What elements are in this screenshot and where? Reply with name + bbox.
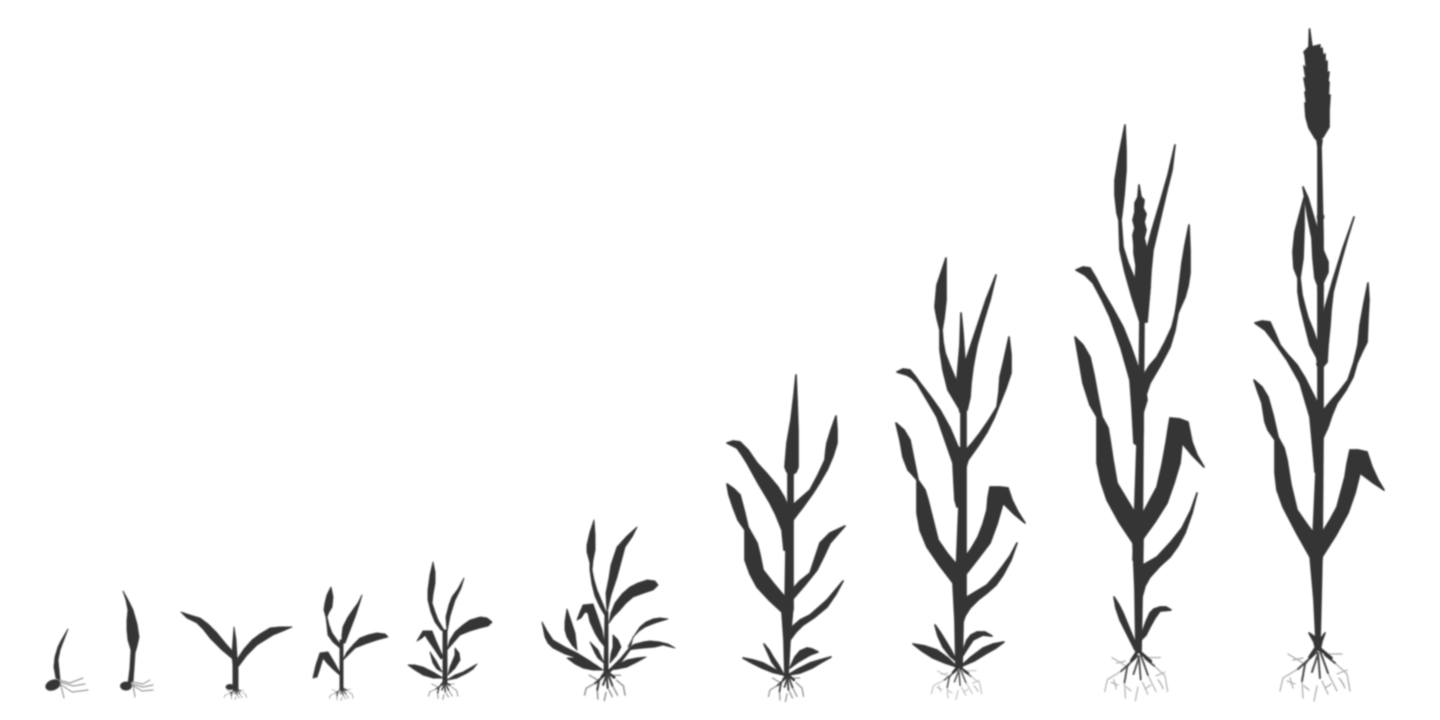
low right leaf [608,657,646,670]
left upright leaf [565,609,577,650]
folded leaf [963,487,1025,578]
roots [224,689,247,700]
plant stage 6: bushy tillers [542,520,675,701]
inner right leaf [448,648,460,675]
roots [585,672,625,701]
plant stage 3: two leaves [181,612,292,700]
low left leaf [913,644,957,667]
shoot [54,629,68,680]
small left leaf [764,644,784,675]
second right leaf [962,543,1017,625]
left leaf [897,369,966,507]
folded leaf [417,631,443,659]
folded leaf [313,652,342,678]
lower stem [782,606,793,676]
inner left leaf [430,652,442,672]
lower stem [1310,555,1322,640]
lower left leaf [1254,380,1322,558]
right leaf [447,617,492,650]
stem [785,470,793,610]
inner right leaf [610,635,621,663]
roots [931,667,982,700]
right upper branch leaf [628,618,668,647]
roots [428,682,458,699]
top right leaf [342,595,362,643]
upper stem [1312,285,1323,560]
right leaf [343,633,388,660]
stem [443,630,447,682]
lower stem [953,580,963,668]
right long leaf [961,275,996,412]
stem node [1318,214,1324,220]
leaf [123,591,139,684]
right fat leaf [609,580,658,623]
low left leaf [567,658,603,670]
top left leaf [1293,198,1322,365]
folded leaf [1142,418,1204,540]
right leaf [238,627,292,667]
lower left leaf [1075,337,1142,552]
right low branch leaf [628,641,675,650]
roots [1105,652,1168,701]
stem [1133,318,1144,560]
low right leaf [788,657,831,675]
sheath [1135,250,1150,322]
seed [120,682,132,690]
small left leaf [1114,597,1137,650]
plant stage 10: mature wheat with ear [1254,29,1384,701]
stem [232,627,238,690]
right low leaf [790,581,843,640]
plant stage 1: germinating seed [44,629,88,698]
top left leaf [935,258,963,412]
plant stage 2: first shoot [120,591,153,697]
small right leaf [962,632,992,657]
right middle leaf [792,526,845,600]
left leaf [1076,267,1147,445]
left leaf [542,622,602,670]
inner left leaf [590,642,604,663]
lower left leaf [896,423,964,590]
right long leaf [1317,217,1354,368]
upper sheath leaf [1303,187,1328,286]
low right leaf [447,664,477,680]
top left leaf [1115,125,1147,322]
right leaf [965,337,1011,470]
right leaf [1143,225,1190,407]
plant stage 5: tillering seedling [408,562,492,699]
plant stage 4: four leaves [313,587,388,701]
plant stage 9: booting with emerging ear [1075,125,1204,701]
top left leaf [324,587,342,648]
centre spire [957,313,970,412]
roots [1280,648,1350,701]
top left leaf [587,520,606,617]
left leaf [1255,321,1323,472]
top right leaf [446,578,464,632]
stem [340,640,343,690]
small left leaf [935,625,957,662]
roots [329,688,353,701]
folded leaf [1322,450,1384,557]
upper left leaf [727,441,793,550]
rootlets [132,680,153,697]
stem [604,612,608,672]
second right leaf [1142,493,1197,597]
top right leaf [606,527,637,613]
lower left leaf [727,484,786,612]
folded leaf [577,604,605,647]
branch [608,647,631,672]
wheat ear [1304,29,1330,141]
stem [955,405,966,600]
right long leaf [1140,145,1175,320]
plant stage 8: flag leaf [896,258,1025,700]
small right leaf [1141,607,1171,640]
small right leaf [790,648,818,668]
left leaf [181,612,234,660]
peduncle [1317,140,1323,290]
lower stem [1133,538,1143,652]
roots [768,675,804,702]
rootlets [59,678,88,698]
stem node [1317,360,1323,368]
seed stub [226,684,234,690]
upper right leaf [793,416,837,520]
low left leaf [743,658,784,675]
basal leaf stubs [1309,633,1325,650]
emerging ear [1133,185,1146,265]
plant stage 7: stem elongation [727,375,845,702]
head leaf [785,375,798,475]
top left leaf [428,562,445,632]
low right leaf [960,642,1004,667]
low left leaf [408,665,443,678]
right leaf [1322,283,1369,440]
seed [44,678,62,692]
